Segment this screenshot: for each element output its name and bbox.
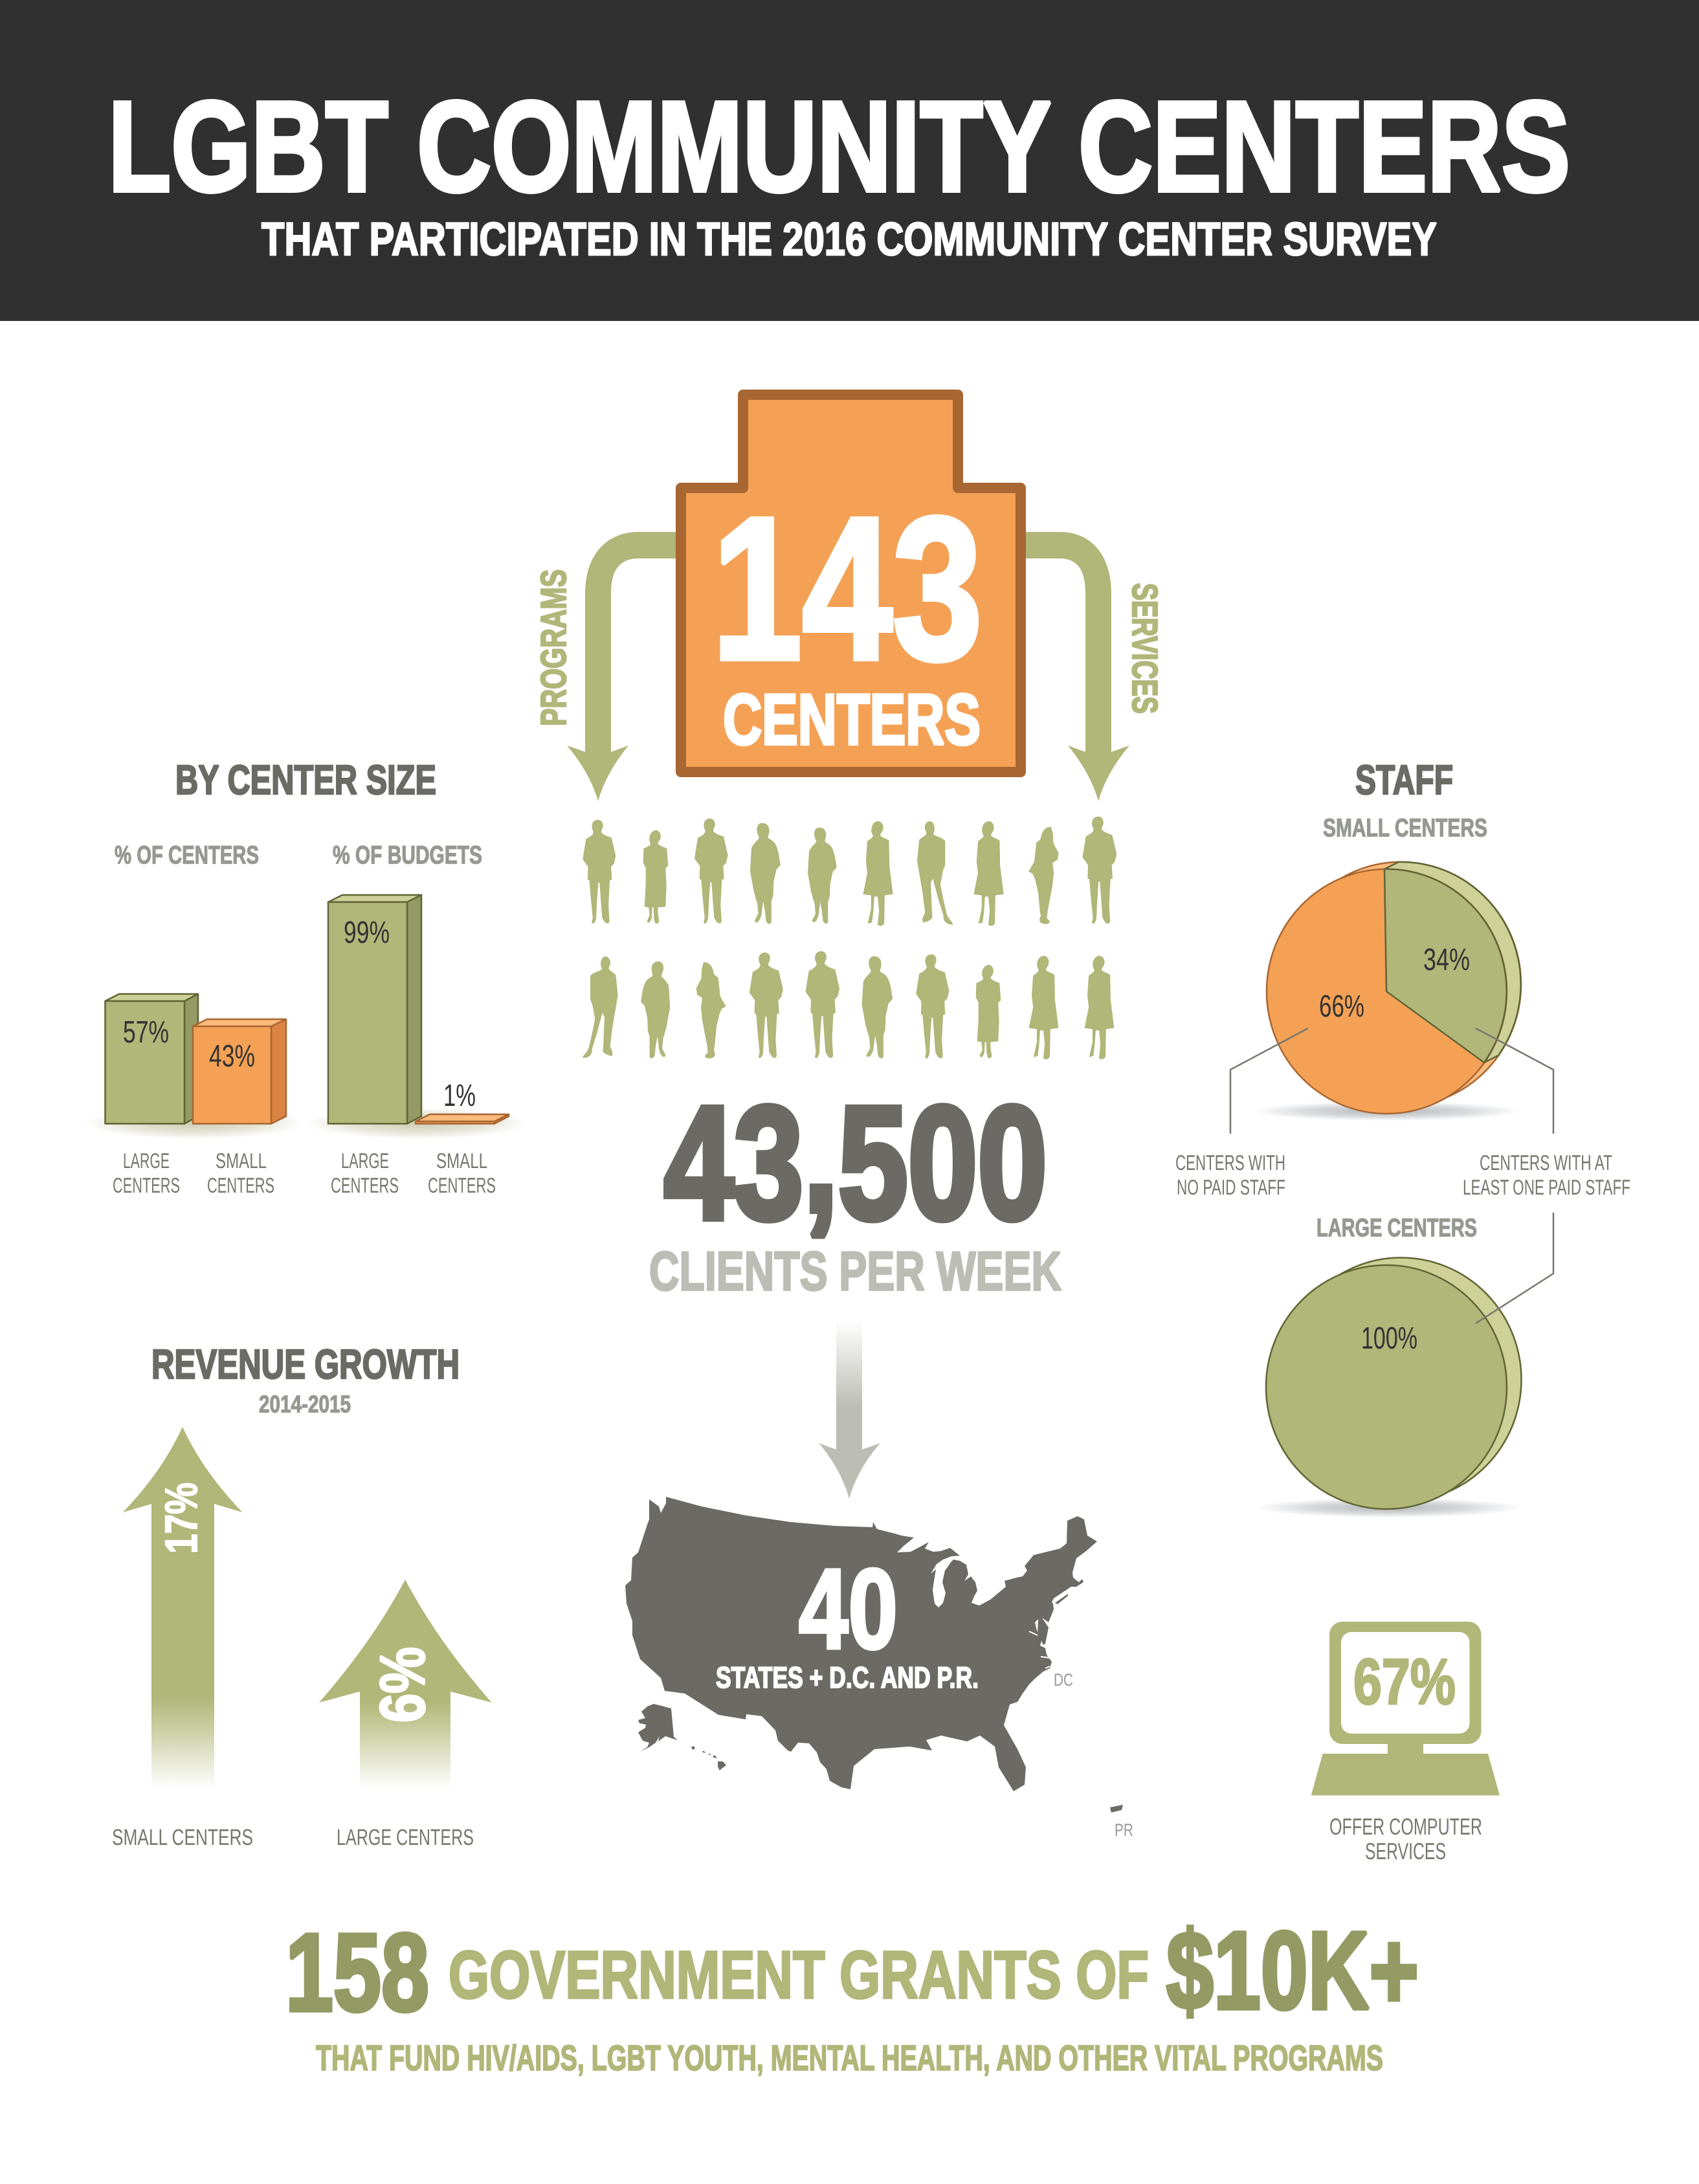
map: Long Island bbox=[1055, 1594, 1068, 1604]
number: 143: 143 bbox=[712, 475, 983, 702]
panel: revenue growth bbox=[112, 1341, 492, 1850]
bar shadow left bbox=[84, 1108, 304, 1139]
subheading: small centers: SMALL CENTERS bbox=[1323, 814, 1487, 843]
label: large centers bbox=[113, 1149, 180, 1197]
label: states: STATES + D.C. AND P.R. bbox=[716, 1660, 979, 1694]
subtitle: THAT PARTICIPATED IN THE 2016 COMMUNITY CENTER SURVEY bbox=[261, 214, 1437, 265]
map: Hawaii bbox=[691, 1746, 726, 1770]
bar: small centers 1% bbox=[416, 1114, 509, 1123]
label: no paid staff: NO PAID STAFF bbox=[1177, 1175, 1285, 1199]
stat: 43,500 clients per week bbox=[649, 1065, 1061, 1302]
callout line: paid staff bbox=[1476, 1028, 1553, 1134]
value: 1%: 1% bbox=[443, 1079, 476, 1113]
subheading: percent of centers: % OF CENTERS bbox=[115, 841, 259, 870]
label: PR: PR bbox=[1115, 1820, 1133, 1840]
number: 40: 40 bbox=[799, 1546, 898, 1673]
arrow: large centers bbox=[319, 1580, 492, 1789]
people silhouettes bbox=[583, 817, 1116, 1059]
bar: large centers 57% bbox=[105, 994, 198, 1123]
label: large centers budgets: LARGE bbox=[341, 1149, 389, 1173]
value: 57%: 57% bbox=[123, 1015, 169, 1050]
pie shadow large bbox=[1254, 1498, 1523, 1517]
pie: large centers bbox=[1266, 1258, 1521, 1509]
arrow: programs bbox=[533, 532, 686, 801]
label: offer computer services: OFFER COMPUTER bbox=[1329, 1813, 1482, 1840]
label: large centers budgets: CENTERS bbox=[331, 1173, 399, 1197]
value: 67%: 67% bbox=[1353, 1646, 1456, 1718]
value: 17%: 17% bbox=[156, 1483, 206, 1554]
label: no paid staff: CENTERS WITH bbox=[1175, 1151, 1285, 1175]
subheading: large centers: LARGE CENTERS bbox=[1316, 1214, 1477, 1242]
header band bbox=[0, 0, 1699, 321]
panel: 143 centers bbox=[681, 395, 1021, 772]
text: government grants of: GOVERNMENT GRANTS OF bbox=[449, 1937, 1149, 2013]
arrow: clients to map bbox=[819, 1320, 880, 1499]
label: at least one paid staff: CENTERS WITH AT bbox=[1480, 1151, 1612, 1175]
value: 34%: 34% bbox=[1423, 943, 1470, 977]
callout line: no paid staff bbox=[1230, 1028, 1308, 1134]
label: at least one paid staff bbox=[1463, 1151, 1630, 1199]
label: small centers budgets: CENTERS bbox=[428, 1173, 496, 1197]
label: clients per week: CLIENTS PER WEEK bbox=[649, 1241, 1061, 1302]
label: small centers: SMALL bbox=[216, 1149, 267, 1173]
value: 100%: 100% bbox=[1361, 1321, 1417, 1356]
callout line: large centers bbox=[1476, 1213, 1553, 1323]
label: small centers: CENTERS bbox=[207, 1173, 274, 1197]
icon: computer bbox=[1311, 1622, 1500, 1795]
label: large centers: LARGE CENTERS bbox=[337, 1825, 474, 1850]
value: 66%: 66% bbox=[1319, 989, 1364, 1024]
bar: large centers 99% bbox=[328, 895, 421, 1123]
label: programs: PROGRAMS bbox=[533, 569, 573, 726]
pie shadow small bbox=[1252, 1101, 1521, 1121]
label: small centers bbox=[207, 1149, 274, 1197]
map: Alaska bbox=[638, 1704, 678, 1752]
bar: small centers 43% bbox=[193, 1019, 286, 1123]
stat: 43,500 clients per week: , bbox=[803, 1065, 838, 1245]
map: United States bbox=[625, 1497, 1133, 1840]
stat: 43,500 clients per week: 43 bbox=[664, 1073, 843, 1253]
value: 43%: 43% bbox=[209, 1039, 255, 1074]
label: small centers budgets bbox=[428, 1149, 496, 1197]
label: large centers: CENTERS bbox=[113, 1173, 180, 1197]
label: small centers: SMALL CENTERS bbox=[112, 1825, 253, 1850]
panel: staff bbox=[1175, 756, 1630, 1517]
stat: 43,500 clients per week: 500 bbox=[838, 1073, 1047, 1253]
heading: by center size: BY CENTER SIZE bbox=[175, 756, 436, 803]
number: $10K+: $10K+ bbox=[1166, 1909, 1419, 2033]
arrow: services bbox=[1016, 532, 1165, 801]
label: offer computer services: SERVICES bbox=[1365, 1838, 1446, 1864]
value: 99%: 99% bbox=[344, 916, 390, 950]
label: large centers: LARGE bbox=[123, 1149, 170, 1173]
computer screen bbox=[1341, 1632, 1469, 1734]
panel: by center size bbox=[84, 756, 529, 1197]
subheading: percent of budgets: % OF BUDGETS bbox=[333, 841, 482, 870]
label: offer computer services bbox=[1329, 1813, 1482, 1864]
label: services: SERVICES bbox=[1125, 583, 1165, 714]
label: small centers budgets: SMALL bbox=[436, 1149, 487, 1173]
label: no paid staff bbox=[1175, 1151, 1285, 1199]
number: 158: 158 bbox=[285, 1911, 429, 2035]
label: DC: DC bbox=[1054, 1670, 1073, 1690]
panel: computer services bbox=[1311, 1622, 1500, 1864]
arrow: small centers bbox=[123, 1427, 242, 1789]
label: large centers budgets bbox=[331, 1149, 399, 1197]
map: Puerto Rico bbox=[1110, 1805, 1123, 1813]
subheading: years: 2014-2015 bbox=[259, 1390, 351, 1417]
label: centers: CENTERS bbox=[723, 679, 981, 760]
value: 6%: 6% bbox=[366, 1647, 438, 1723]
heading: revenue growth: REVENUE GROWTH bbox=[151, 1341, 460, 1387]
bar shadow right bbox=[306, 1108, 529, 1139]
heading: staff: STAFF bbox=[1355, 756, 1453, 803]
panel: government grants bbox=[285, 1909, 1419, 2078]
pie: small centers bbox=[1267, 862, 1521, 1114]
